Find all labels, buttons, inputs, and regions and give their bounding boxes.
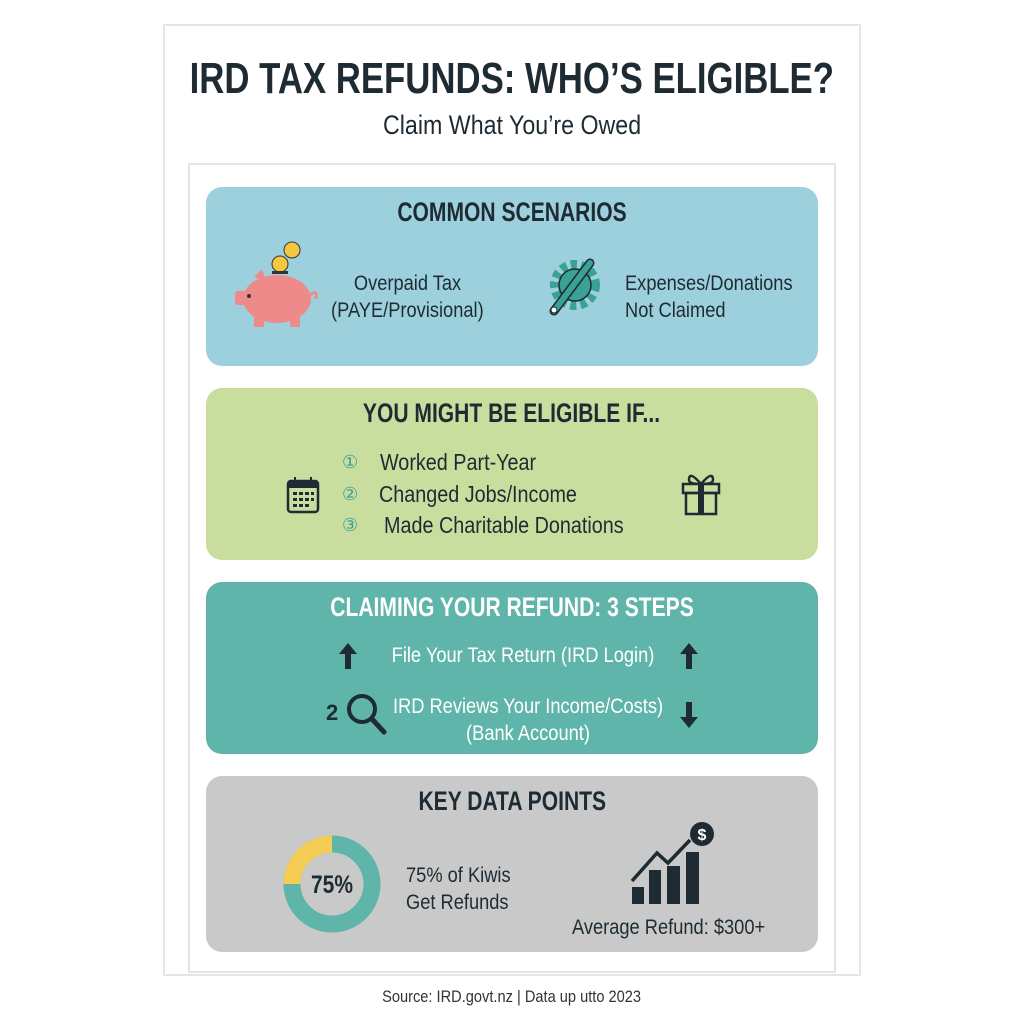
panel: key data: [206, 776, 818, 952]
text: expenses: Not Claimed: [625, 299, 726, 322]
text: 75% kiwis: Get Refunds: [406, 891, 509, 914]
step 2 text: (Bank Account): [466, 722, 590, 745]
icon: piggy bank: [235, 242, 318, 327]
heading: KEY DATA POINTS: [418, 786, 606, 816]
donut chart: [284, 836, 380, 932]
icon: wrench gear: [550, 258, 600, 316]
panel: claiming steps: [206, 582, 818, 754]
list: [342, 449, 624, 538]
text: overpaid tax: Overpaid Tax: [354, 272, 461, 295]
text: overpaid tax: (PAYE/Provisional): [331, 299, 484, 322]
icon: growth chart: $: [698, 827, 707, 844]
subtitle: Claim What You’re Owed: [383, 110, 641, 140]
step 2 number and magnifier: [326, 694, 386, 734]
list: ②: [342, 484, 358, 504]
heading: YOU MIGHT BE ELIGIBLE IF...: [363, 398, 661, 428]
list: Worked Part-Year: [380, 449, 536, 475]
text: average refund: Average Refund: $300+: [572, 916, 765, 939]
inner frame: [188, 163, 836, 973]
step 2 text: [393, 695, 663, 745]
source footer: Source: IRD.govt.nz | Data up utto 2023: [383, 987, 641, 1006]
arrow up left: [339, 643, 357, 669]
list: ③: [342, 515, 358, 535]
outer card: [163, 24, 861, 976]
arrow up right: [680, 643, 698, 669]
donut chart: 75%: [311, 870, 353, 898]
list: Changed Jobs/Income: [379, 481, 577, 507]
text: 75% kiwis: 75% of Kiwis: [406, 864, 511, 887]
step 2 text: IRD Reviews Your Income/Costs): [393, 695, 663, 718]
arrow down: [680, 702, 698, 728]
panel: eligible if: [206, 388, 818, 560]
icon: calendar: [286, 477, 320, 514]
step 1: File Your Tax Return (IRD Login): [392, 644, 654, 667]
icon: growth chart: [630, 822, 714, 904]
text: expenses: [625, 272, 793, 322]
panel: common scenarios: [206, 187, 818, 366]
text: 75% kiwis: [406, 864, 511, 914]
heading: COMMON SCENARIOS: [397, 197, 627, 227]
heading: CLAIMING YOUR REFUND: 3 STEPS: [330, 592, 694, 622]
icon: gift: [682, 474, 720, 516]
list: Made Charitable Donations: [384, 512, 624, 538]
text: overpaid tax: [331, 272, 484, 322]
title: IRD TAX REFUNDS: WHO’S ELIGIBLE?: [190, 54, 834, 103]
step 2 number and magnifier: 2: [326, 700, 338, 725]
list: ①: [342, 452, 358, 472]
text: expenses: Expenses/Donations: [625, 272, 793, 295]
